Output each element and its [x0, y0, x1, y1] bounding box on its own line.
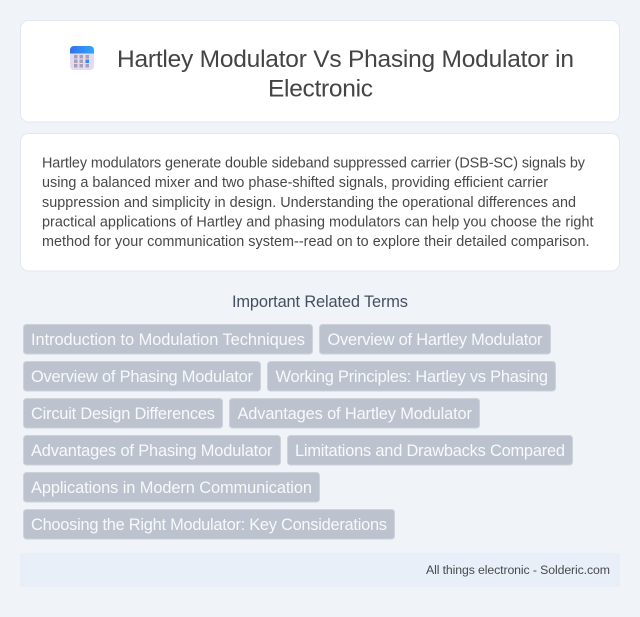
tag	[24, 436, 280, 465]
tag: Working Principles: Hartley vs Phasing	[276, 368, 548, 386]
tag: Applications in Modern Communication	[31, 479, 312, 497]
footer: All things electronic - Solderic.com	[426, 563, 610, 577]
title: Hartley Modulator Vs Phasing Modulator in	[117, 46, 574, 73]
title	[117, 46, 574, 102]
tag	[24, 324, 312, 354]
tag: Circuit Design Differences	[31, 405, 215, 423]
tag	[268, 362, 556, 391]
tag: Advantages of Phasing Modulator	[31, 442, 273, 460]
text block: summary paragraph: method for your communication system--read on to explore their detailed comparison.	[42, 234, 590, 250]
text block: summary paragraph: Hartley modulators generate double sideband suppressed carrier (DSB-SC) signals by	[42, 156, 586, 172]
title: Electronic	[268, 76, 373, 102]
tag	[24, 510, 394, 539]
tag list	[24, 324, 572, 539]
tag	[24, 398, 222, 428]
tag	[24, 362, 260, 391]
panel: title header	[20, 20, 620, 122]
tag	[320, 324, 550, 354]
tag: Overview of Phasing Modulator	[31, 368, 254, 386]
footer	[20, 553, 620, 587]
tag: Introduction to Modulation Techniques	[31, 331, 305, 349]
icon: calendar	[70, 46, 94, 70]
tag	[230, 398, 480, 428]
text block: summary paragraph: practical applications of Hartley and phasing modulators can help you choose the right	[42, 214, 594, 230]
text block: summary paragraph: suppression and simplicity in design. Understanding the operational differences and	[42, 195, 576, 211]
panel: summary	[20, 134, 620, 271]
text block: summary paragraph: using a balanced mixer and two phase-shifted signals, providing efficient carrier	[42, 175, 548, 191]
text block: summary paragraph	[42, 156, 594, 250]
tag	[288, 436, 572, 465]
tag: Choosing the Right Modulator: Key Considerations	[31, 516, 387, 534]
tag	[24, 472, 320, 502]
tag: Advantages of Hartley Modulator	[238, 405, 473, 423]
tag: Overview of Hartley Modulator	[328, 331, 543, 349]
heading: related terms: Important Related Terms	[232, 293, 408, 311]
tag: Limitations and Drawbacks Compared	[295, 442, 565, 460]
